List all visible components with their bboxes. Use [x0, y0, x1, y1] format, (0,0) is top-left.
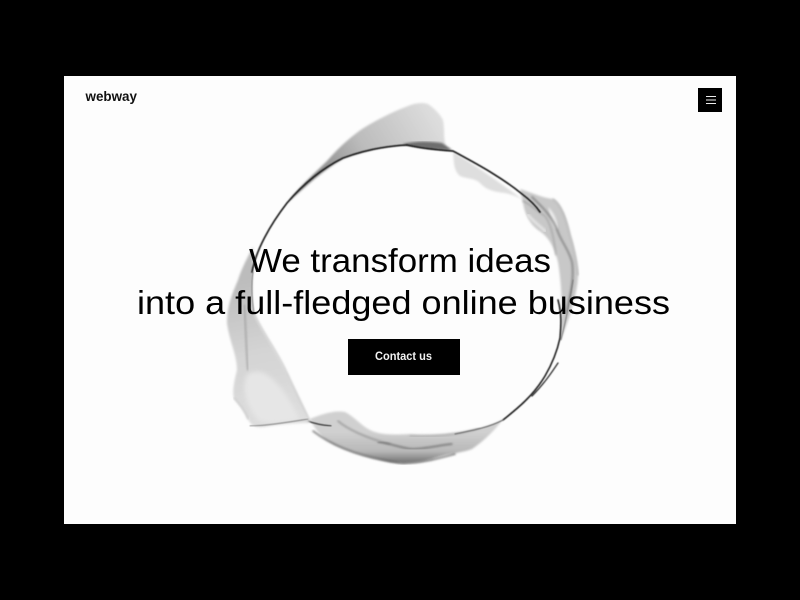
- ribbon: upper right light fold: [453, 152, 527, 203]
- ribbon: bottom sweep: [305, 412, 503, 463]
- panel: white page: [64, 76, 736, 524]
- ribbon: right shoulder: [520, 189, 578, 340]
- icon: hamburger: [706, 96, 716, 104]
- ribbon: dark core line: [252, 145, 573, 434]
- heading: We transform ideas: [249, 242, 551, 279]
- graphic: mesh ribbon ring: [227, 103, 578, 463]
- menu button: [698, 88, 722, 112]
- heading: [137, 242, 670, 321]
- logo: webway: [85, 89, 137, 104]
- button: contact us: Contact us: [375, 351, 432, 363]
- ribbon: lower left fold: [227, 247, 310, 427]
- button: contact us: [348, 339, 460, 375]
- heading: into a full-fledged online business: [137, 284, 670, 321]
- ribbon: top fold: [287, 103, 452, 203]
